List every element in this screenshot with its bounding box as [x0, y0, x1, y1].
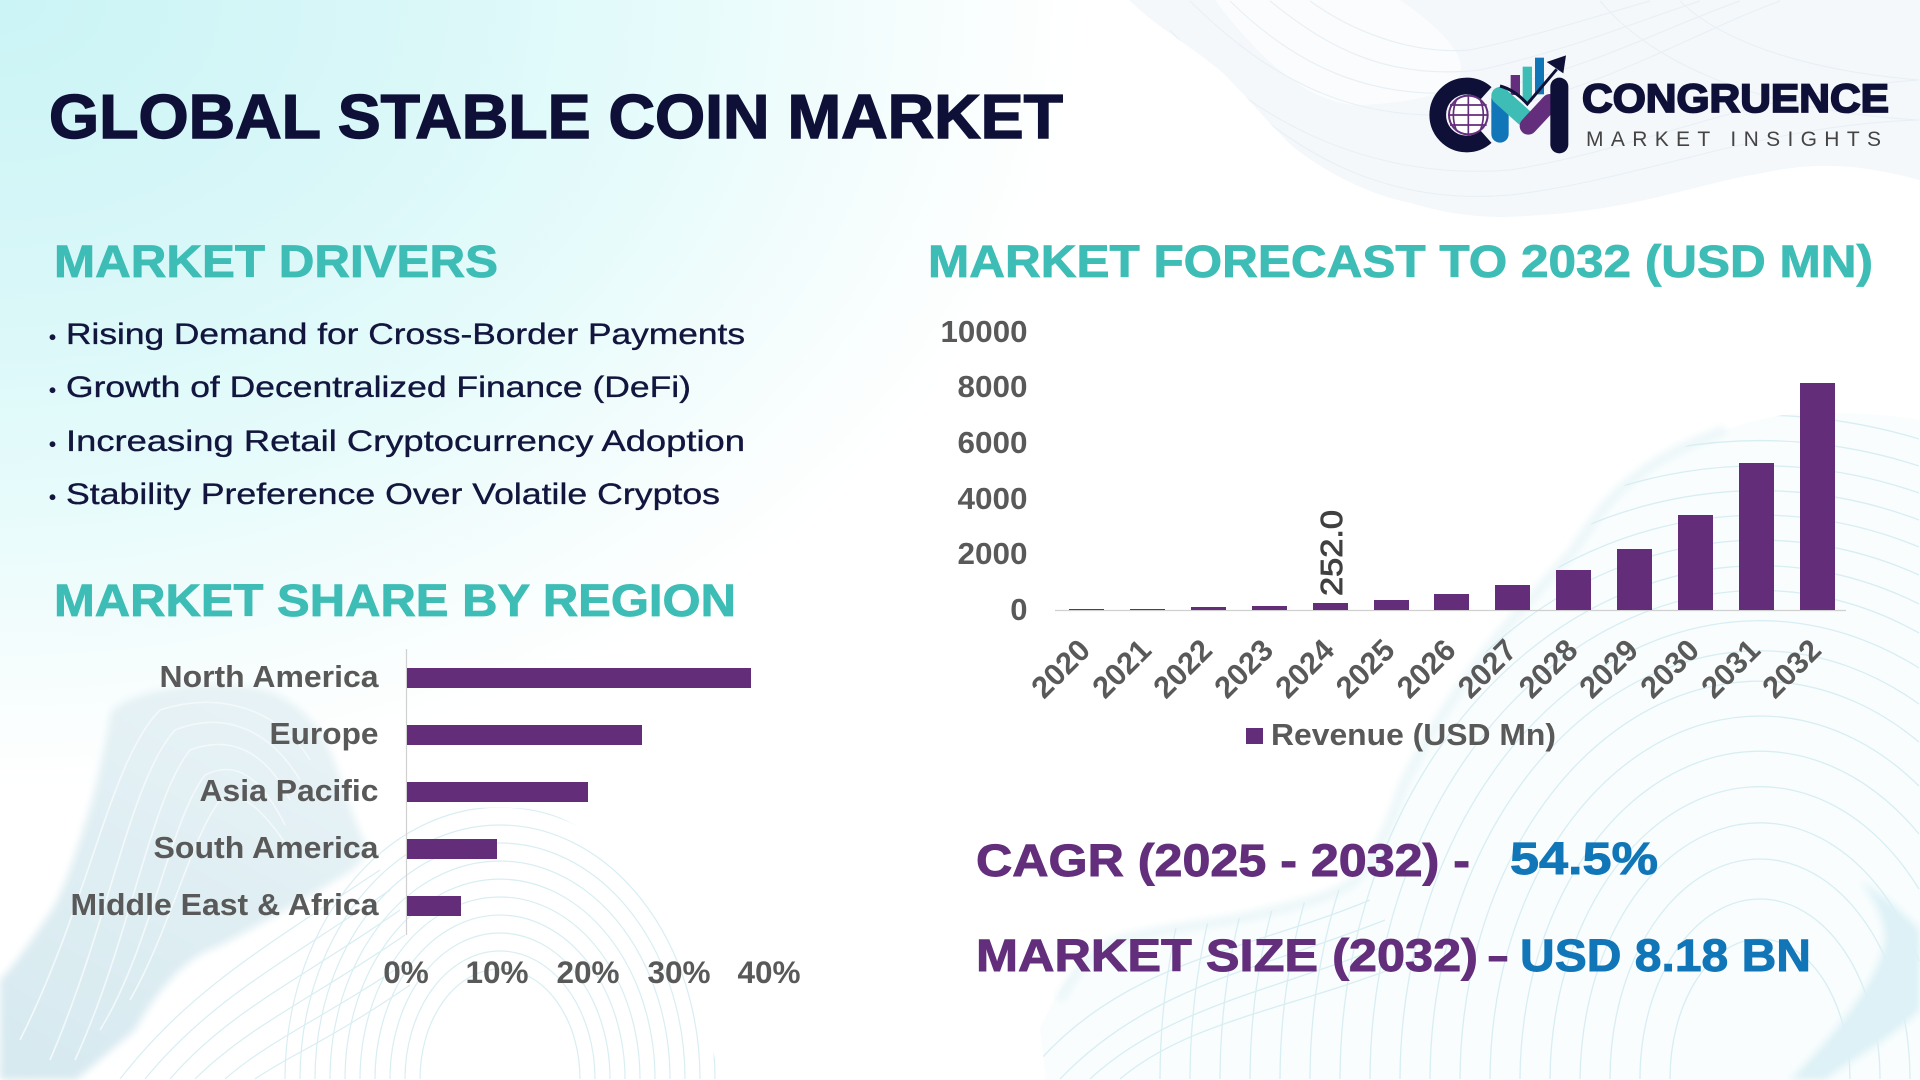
- y-axis labels: 4000: [958, 481, 1028, 516]
- column chart: revenue forecast: [940, 314, 1846, 752]
- x-axis year labels: 2032: [1756, 633, 1828, 705]
- columns 2020-2032: [1069, 383, 1835, 610]
- bullet: DeFi: Growth of Decentralized Finance (DeFi): [66, 371, 691, 404]
- logo: Congruence Market Insights: [1438, 55, 1889, 151]
- data label 2024: 252.0: [1314, 510, 1349, 596]
- x-axis labels: [383, 954, 801, 990]
- stat: market size: –: [1488, 930, 1508, 981]
- heading: market drivers: MARKET DRIVERS: [54, 236, 498, 287]
- logo wordmark: CONGRUENCE: [1582, 77, 1889, 121]
- stat: market size: USD 8.18 BN: [1520, 930, 1811, 981]
- x-axis labels: 40%: [737, 954, 801, 990]
- stat: market size: [976, 930, 1811, 981]
- bar: Asia Pacific: Asia Pacific: [200, 773, 378, 808]
- x-axis year labels: 2022: [1147, 633, 1219, 705]
- heading: market forecast: MARKET FORECAST TO 2032 (USD MN): [928, 236, 1873, 287]
- bullet: cross-border payments: Rising Demand for Cross-Border Payments: [66, 318, 745, 351]
- list: market drivers: [49, 318, 745, 511]
- stat: CAGR: 54.5%: [1510, 833, 1658, 884]
- bullet: retail adoption: Increasing Retail Cryptocurrency Adoption: [66, 425, 745, 458]
- x-axis year labels: 2026: [1390, 633, 1462, 705]
- x-axis year labels: 2030: [1634, 633, 1706, 705]
- stat: market size: MARKET SIZE (2032): [976, 930, 1478, 981]
- logo tagline: MARKET INSIGHTS: [1586, 128, 1881, 151]
- bullet: retail adoption: •: [49, 434, 56, 456]
- bar: Asia Pacific: [200, 773, 588, 808]
- legend: Revenue (USD Mn): [1271, 717, 1556, 752]
- bar: South America: [154, 830, 497, 865]
- bar: Middle East and Africa: Middle East & Africa: [70, 887, 379, 922]
- x-axis year labels: 2031: [1695, 633, 1767, 705]
- stat: CAGR: CAGR (2025 - 2032) -: [976, 835, 1470, 886]
- x-axis year labels: 2025: [1329, 633, 1401, 705]
- bar: North America: North America: [160, 659, 379, 694]
- bullet: DeFi: •: [49, 380, 56, 402]
- x-axis year labels: 2021: [1086, 633, 1158, 705]
- x-axis year labels: 2028: [1512, 633, 1584, 705]
- bullet: stability preference: •: [49, 487, 56, 509]
- y-axis labels: 8000: [958, 369, 1028, 404]
- y-axis labels: 0: [1010, 592, 1028, 627]
- x-axis year labels: 2020: [1025, 633, 1097, 705]
- bullet: stability preference: Stability Preference Over Volatile Cryptos: [66, 478, 720, 511]
- bar: Europe: [270, 716, 642, 751]
- x-axis year labels: 2023: [1208, 633, 1280, 705]
- x-axis year labels: 2027: [1451, 633, 1523, 705]
- logo mark: CM with globe and growth arrow: [1438, 55, 1566, 144]
- x-axis year labels: 2024: [1269, 633, 1341, 705]
- y-axis labels: 2000: [958, 536, 1028, 571]
- bar: Europe: Europe: [270, 716, 378, 751]
- x-axis year labels: 2029: [1573, 633, 1645, 705]
- title: GLOBAL STABLE COIN MARKET: [49, 83, 1063, 152]
- x-axis year labels: [1025, 633, 1828, 705]
- bar: South America: South America: [154, 830, 379, 865]
- stat: CAGR: [976, 833, 1658, 886]
- bar chart: market share by region: [70, 649, 801, 990]
- y-axis labels: 6000: [958, 425, 1028, 460]
- bar: North America: [160, 659, 751, 694]
- x-axis labels: 0%: [383, 954, 429, 990]
- heading: market share by region: MARKET SHARE BY REGION: [54, 575, 736, 626]
- x-axis labels: 20%: [556, 954, 620, 990]
- bullet: cross-border payments: •: [49, 327, 56, 349]
- x-axis labels: 10%: [465, 954, 529, 990]
- y-axis labels: [940, 314, 1028, 627]
- x-axis labels: 30%: [647, 954, 711, 990]
- y-axis labels: 10000: [940, 314, 1028, 349]
